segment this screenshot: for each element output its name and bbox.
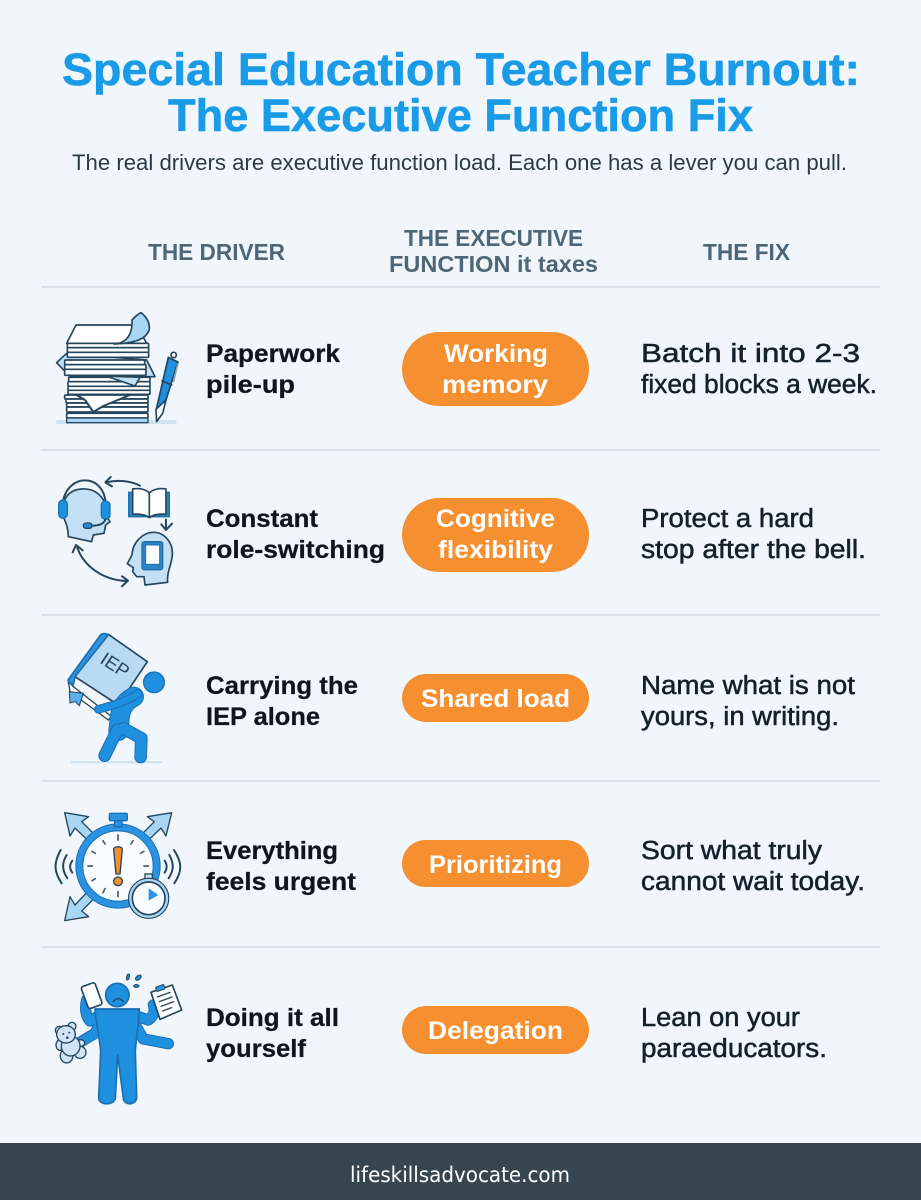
- driver label: role-switching: [206, 536, 385, 564]
- pill: working memory: Working: [444, 340, 548, 368]
- row 4: everything feels urgent: [56, 813, 865, 921]
- driver label: feels urgent: [206, 868, 357, 896]
- driver label: [206, 837, 357, 896]
- pill: cognitive flexibility: flexibility: [438, 536, 553, 564]
- pill: working memory: memory: [442, 371, 548, 399]
- subtitle: The real drivers are executive function load. Each one has a lever you can pull.: [72, 150, 847, 175]
- icon: figure carrying IEP book: [68, 634, 164, 763]
- driver label: [206, 340, 340, 399]
- icon: paper stack and pen: [56, 313, 178, 424]
- pill: prioritizing: [402, 840, 589, 887]
- driver label: yourself: [206, 1035, 307, 1063]
- column heading: the driver: THE DRIVER: [148, 239, 285, 265]
- column heading: the executive function it taxes: THE EXECUTIVE: [404, 225, 583, 251]
- fix text: Protect a hard: [641, 505, 814, 533]
- column heading: the executive function it taxes: FUNCTION it taxes: [389, 251, 598, 277]
- fix text: [641, 340, 877, 399]
- driver label: Paperwork: [206, 340, 340, 368]
- column heading: the fix: THE FIX: [703, 239, 791, 265]
- icon: heads, book and tablet with arrows: [59, 477, 172, 586]
- icon: overwhelmed multi-armed figure: [55, 974, 182, 1104]
- driver label: IEP alone: [206, 703, 320, 731]
- pill: cognitive flexibility: Cognitive: [436, 505, 555, 533]
- pill: delegation: [402, 1006, 589, 1054]
- pill: working memory: [402, 332, 589, 406]
- title: [62, 44, 860, 141]
- driver label: pile-up: [206, 371, 295, 399]
- pill: prioritizing: Prioritizing: [429, 851, 562, 879]
- driver label: Doing it all: [206, 1004, 339, 1032]
- fix text: yours, in writing.: [641, 703, 839, 731]
- fix text: [641, 837, 865, 896]
- footer bar: lifeskillsadvocate.com: [350, 1163, 570, 1187]
- pill: delegation: Delegation: [428, 1017, 563, 1045]
- fix text: Lean on your: [641, 1004, 801, 1032]
- driver label: [206, 505, 385, 564]
- fix text: Sort what truly: [641, 837, 822, 865]
- driver label: [206, 672, 358, 731]
- column heading: the executive function it taxes: [389, 225, 598, 277]
- row 5: doing it all yourself: [55, 974, 827, 1104]
- title: Special Education Teacher Burnout:: [62, 44, 860, 95]
- fix text: [641, 505, 866, 564]
- icon: stopwatch with arrows: [56, 813, 180, 921]
- icon: figure carrying IEP book: IEP: [97, 648, 133, 682]
- row 2: constant role-switching: [59, 477, 866, 586]
- fix text: stop after the bell.: [641, 536, 866, 564]
- driver label: Everything: [206, 837, 338, 865]
- pill: shared load: Shared load: [421, 685, 570, 713]
- fix text: [641, 1004, 827, 1063]
- title: The Executive Function Fix: [168, 90, 753, 141]
- fix text: [641, 672, 855, 731]
- fix text: cannot wait today.: [641, 868, 865, 896]
- pill: cognitive flexibility: [402, 498, 589, 572]
- driver label: [206, 1004, 339, 1063]
- pill: shared load: [402, 674, 589, 722]
- row 3: carrying the IEP alone: [68, 634, 855, 763]
- fix text: paraeducators.: [641, 1035, 827, 1063]
- fix text: Batch it into 2-3: [641, 340, 860, 368]
- driver label: Carrying the: [206, 672, 358, 700]
- footer bar: [0, 1143, 921, 1200]
- fix text: fixed blocks a week.: [641, 371, 877, 399]
- driver label: Constant: [206, 505, 319, 533]
- row 1: paperwork pile-up: [56, 313, 877, 424]
- fix text: Name what is not: [641, 672, 855, 700]
